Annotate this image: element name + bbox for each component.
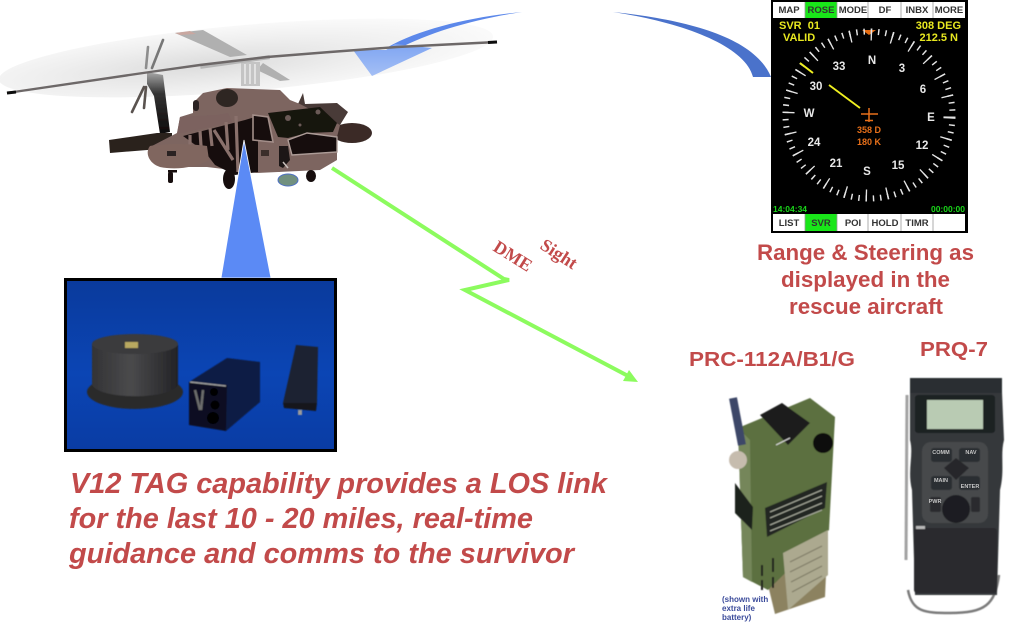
compass labels: 6 xyxy=(920,84,926,96)
compass labels: W xyxy=(804,108,815,120)
clocks: 14:04:34 xyxy=(773,204,807,214)
key legends: PWR xyxy=(929,499,941,505)
tail fin xyxy=(147,72,170,134)
radio: PRQ-7 xyxy=(906,378,1004,613)
left sponson xyxy=(148,144,209,168)
cabin window xyxy=(253,115,273,142)
sensor ball xyxy=(278,174,298,186)
bottom softkeys: TIMR xyxy=(905,218,929,229)
radio body xyxy=(738,398,835,590)
side latch xyxy=(735,483,753,530)
caption: range and steering: Range & Steering as xyxy=(757,240,974,265)
windscreen xyxy=(288,133,337,155)
status readouts: 212.5 N xyxy=(919,32,958,44)
key legends xyxy=(929,450,979,505)
top softkeys: MODE xyxy=(839,5,867,16)
compass labels: 12 xyxy=(916,140,928,152)
range and speed: 358 D xyxy=(857,125,882,135)
function keys xyxy=(931,448,980,490)
main statement: guidance and comms to the survivor xyxy=(68,538,576,570)
power knob xyxy=(813,433,833,453)
bottom softkeys: HOLD xyxy=(872,218,899,229)
screen bezel xyxy=(915,395,995,433)
blue arc arrow: left xyxy=(0,4,522,112)
clocks xyxy=(773,204,965,214)
engine strut xyxy=(177,113,232,134)
bottom softkeys: LIST xyxy=(779,218,799,229)
direction pad xyxy=(944,458,969,480)
selector dial xyxy=(942,495,970,523)
main statement xyxy=(68,468,609,570)
label: Sight: Sight xyxy=(537,235,581,273)
rotor mast and hub xyxy=(175,30,290,86)
blue signal cone xyxy=(221,140,271,278)
compass labels: 30 xyxy=(810,81,822,93)
antenna connector xyxy=(729,451,747,469)
main rotor blade xyxy=(7,42,497,93)
blade antenna xyxy=(283,345,318,415)
LCD xyxy=(927,400,983,429)
key legends: MAIN xyxy=(934,478,948,484)
antenna xyxy=(733,398,742,445)
antenna dome xyxy=(87,334,183,409)
compass labels: E xyxy=(927,112,935,124)
bottom softkeys: POI xyxy=(845,218,861,229)
top softkeys: MAP xyxy=(778,5,800,16)
carry loop xyxy=(908,575,999,613)
top softkeys: MORE xyxy=(935,5,963,16)
cabin struts xyxy=(190,116,238,172)
rotor disc xyxy=(0,4,496,112)
channel selector xyxy=(760,403,810,445)
small keys xyxy=(930,497,941,512)
cabin dark structure xyxy=(183,116,258,175)
compass labels: 24 xyxy=(808,137,821,149)
top softkeys: DF xyxy=(879,5,892,16)
caption: range and steering: displayed in the xyxy=(781,267,950,292)
status readouts: VALID xyxy=(783,32,815,44)
whip xyxy=(906,395,907,560)
compass labels: N xyxy=(868,55,876,67)
caption: range and steering xyxy=(757,240,974,319)
receiver box xyxy=(189,358,260,431)
range and speed xyxy=(857,125,882,147)
bottom softkeys xyxy=(773,214,965,231)
clocks: 00:00:00 xyxy=(931,204,965,214)
cockpit display xyxy=(771,0,968,233)
aircraft symbol xyxy=(861,108,878,122)
compass rose ticks xyxy=(783,29,955,201)
battery note xyxy=(722,595,768,622)
compass labels: 33 xyxy=(833,61,845,73)
battery note: battery) xyxy=(722,613,752,622)
battery base xyxy=(768,530,828,614)
body xyxy=(910,378,1004,595)
label: PRQ-7: PRQ-7 xyxy=(920,339,988,361)
status readouts: SVR 01 xyxy=(779,20,820,32)
status readouts: 308 DEG xyxy=(916,20,961,32)
label: PRC-112A/B1/G: PRC-112A/B1/G xyxy=(689,349,855,371)
range and speed: 180 K xyxy=(857,137,882,147)
key legends: COMM xyxy=(932,450,950,456)
door xyxy=(259,145,280,172)
helicopter xyxy=(7,30,497,189)
top softkeys xyxy=(773,2,965,18)
compass labels: 21 xyxy=(830,158,843,170)
top softkeys: ROSE xyxy=(808,5,834,16)
compass labels: 3 xyxy=(899,63,905,75)
main statement: for the last 10 - 20 miles, real-time xyxy=(69,503,533,535)
exhaust and rear deck xyxy=(290,93,348,125)
compass labels xyxy=(804,55,935,178)
key legends: ENTER xyxy=(961,484,979,490)
bottom softkeys: SVR xyxy=(811,218,831,229)
main statement: V12 TAG capability provides a LOS link xyxy=(70,468,609,500)
photo: V12 TAG hardware xyxy=(66,280,336,450)
battery plate xyxy=(783,530,828,610)
right sponson xyxy=(332,123,372,143)
caption: range and steering: rescue aircraft xyxy=(789,294,944,319)
label: DME: DME xyxy=(490,236,536,276)
data plate xyxy=(765,482,827,537)
bearing needle xyxy=(800,63,860,108)
heading marker xyxy=(862,30,876,35)
battery note: extra life xyxy=(722,604,755,613)
engine intake xyxy=(216,89,238,107)
status readouts xyxy=(779,20,961,44)
cockpit dark panel xyxy=(268,107,337,138)
tail rotor xyxy=(132,40,163,112)
top softkeys: INBX xyxy=(906,5,929,16)
key legends: NAV xyxy=(965,450,977,456)
top band xyxy=(910,378,1002,393)
fuselage xyxy=(148,88,340,173)
green DME link arrow xyxy=(332,168,638,382)
landing gear xyxy=(168,169,316,189)
compass labels: S xyxy=(863,166,871,178)
battery compartment xyxy=(914,528,997,593)
tail stabilizer xyxy=(109,133,172,153)
vents xyxy=(762,558,773,590)
radio: PRC-112 xyxy=(722,398,835,622)
blue arc arrow: right xyxy=(613,12,771,77)
keypad xyxy=(922,442,988,523)
battery note: (shown with xyxy=(722,595,768,604)
compass labels: 15 xyxy=(892,160,905,172)
